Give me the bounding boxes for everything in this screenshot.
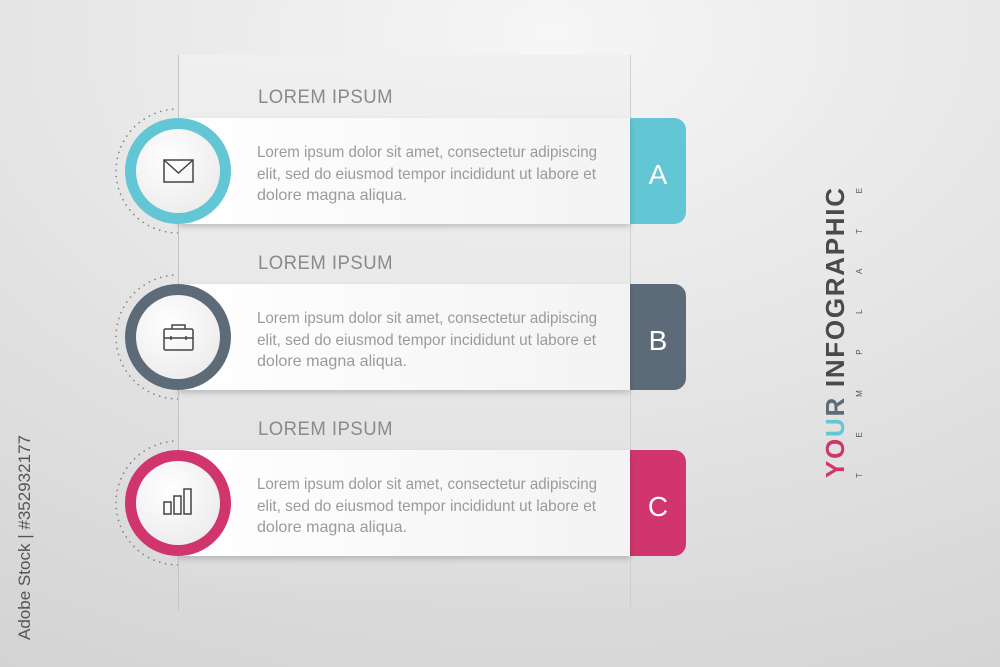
body A	[257, 144, 597, 204]
heading B: LOREM IPSUM	[258, 253, 393, 274]
tab A	[620, 118, 686, 224]
body C: elit, sed do eiusmod tempor incididunt ut labore et	[257, 498, 597, 515]
row A	[116, 87, 686, 233]
band A	[178, 118, 630, 224]
heading C: LOREM IPSUM	[258, 419, 393, 440]
tab B	[620, 284, 686, 390]
side credit text: Adobe Stock | #352932177	[15, 435, 34, 640]
body B: Lorem ipsum dolor sit amet, consectetur adipiscing	[257, 310, 597, 327]
row C: C	[648, 491, 668, 522]
body C	[257, 476, 597, 536]
icon: bar chart	[164, 489, 191, 514]
body B	[257, 310, 597, 370]
back panel	[178, 55, 630, 615]
body A: Lorem ipsum dolor sit amet, consectetur adipiscing	[257, 144, 597, 161]
icon: envelope	[164, 160, 193, 182]
body B: elit, sed do eiusmod tempor incididunt ut labore et	[257, 332, 597, 349]
heading A: LOREM IPSUM	[258, 87, 393, 108]
tab C	[620, 450, 686, 556]
subtitle: TEMPLATE: TEMPLATE	[855, 188, 864, 478]
icon circle C	[116, 441, 240, 565]
row A: A	[649, 159, 668, 190]
icon circle A	[116, 109, 240, 233]
row B: B	[649, 325, 667, 356]
body C: dolore magna aliqua.	[257, 519, 407, 536]
band B	[178, 284, 630, 390]
icon circle B	[116, 275, 240, 399]
body C: Lorem ipsum dolor sit amet, consectetur adipiscing	[257, 476, 597, 493]
icon: briefcase	[164, 325, 193, 350]
body A: elit, sed do eiusmod tempor incididunt ut labore et	[257, 166, 597, 183]
body B: dolore magna aliqua.	[257, 353, 407, 370]
row B	[116, 253, 686, 399]
body A: dolore magna aliqua.	[257, 187, 407, 204]
title: YOUR INFOGRAPHIC: YOUR INFOGRAPHIC	[820, 188, 850, 478]
row C	[116, 419, 686, 565]
band C	[178, 450, 630, 556]
